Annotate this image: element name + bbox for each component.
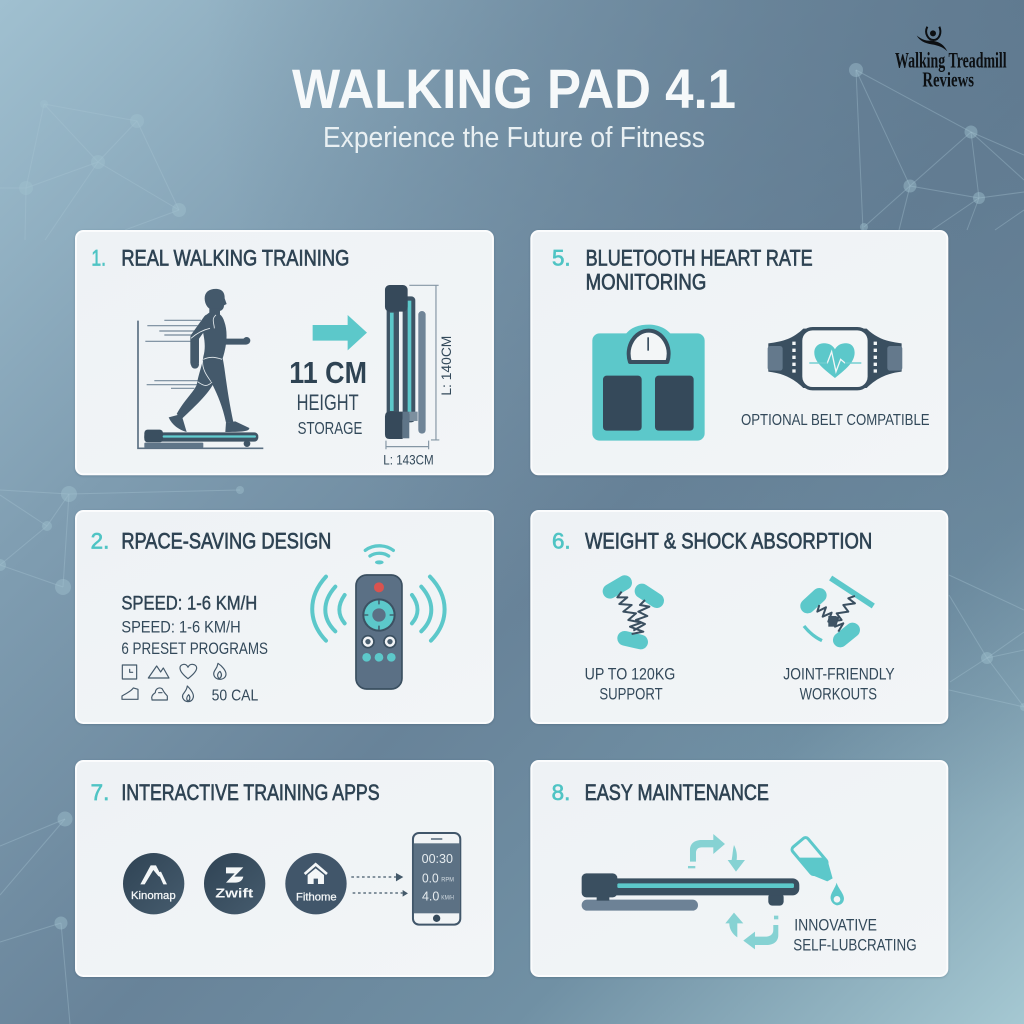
app: Kinomap: Kinomap [131, 890, 176, 902]
icon: spring support [610, 583, 657, 642]
logo icon [917, 27, 947, 51]
panel 1: real walking training [76, 231, 493, 474]
icon: remote control [312, 546, 445, 689]
heading number: 2. [91, 529, 109, 554]
icon: phone: 0.0 [422, 871, 439, 885]
panel 5: bluetooth heart rate monitoring [531, 231, 947, 474]
app: Fithome: Fithome [296, 892, 337, 904]
icon: heart rate belt [768, 329, 902, 389]
icon: phone: RPM [441, 877, 454, 883]
program icons [122, 663, 226, 702]
app: Kinomap [123, 853, 184, 914]
spec: speed bold: SPEED: 1-6 KM/H [121, 593, 257, 614]
heading number: 1. [91, 245, 106, 270]
icon: phone: KM/H [441, 896, 454, 902]
label: support: SUPPORT [599, 684, 663, 703]
stat: 11 cm: 11 CM [289, 356, 367, 390]
icon: lubricant bottle [791, 836, 844, 905]
app: Zwift [204, 853, 265, 914]
heading number: 7. [91, 780, 109, 805]
heading: BLUETOOTH HEART RATE [586, 245, 813, 270]
icon: walker on treadmill [138, 289, 263, 448]
icon: joint-friendly spring [804, 578, 873, 641]
panel 8: easy maintenance [531, 761, 947, 976]
heading: REAL WALKING TRAINING [121, 245, 349, 270]
heading: EASY MAINTENANCE [585, 780, 769, 805]
heading number: 8. [552, 780, 570, 805]
label: optional belt: OPTIONAL BELT COMPATIBLE [741, 412, 930, 429]
dimension: length: L: 143CM [383, 451, 434, 467]
heading number: 5. [552, 245, 571, 270]
dimension: height: L: 140CM [438, 336, 454, 396]
icon: smart scale [592, 325, 705, 441]
icon: phone: 4.0 [422, 890, 439, 904]
arrow [313, 315, 367, 350]
logo text line 2: Reviews [922, 69, 974, 91]
arrows to phone [351, 873, 408, 897]
icon: phone [413, 833, 460, 925]
title: WALKING PAD 4.1 [292, 57, 736, 120]
heading number: 6. [552, 529, 571, 554]
panel 2: space-saving design [76, 511, 493, 723]
subtitle: Experience the Future of Fitness [323, 122, 705, 154]
icon: folded walking pad with dimensions [383, 285, 454, 467]
label: up to 120kg: UP TO 120KG [585, 664, 675, 683]
panel 6: weight and shock absorption [531, 511, 947, 723]
label: 50 cal: 50 CAL [212, 688, 258, 705]
logo: Walking Treadmill Reviews [895, 27, 1007, 91]
icon: phone: 00:30 [422, 852, 453, 866]
label: joint-friendly: JOINT-FRIENDLY [783, 664, 895, 683]
panel 7: interactive training apps [76, 761, 493, 976]
label: innovative: INNOVATIVE [794, 916, 877, 935]
heading line 2: MONITORING [586, 269, 706, 294]
heading: RPACE-SAVING DESIGN [121, 529, 331, 554]
label: height: HEIGHT [297, 390, 359, 415]
label: workouts: WORKOUTS [800, 684, 877, 703]
spec: preset programs: 6 PRESET PROGRAMS [121, 639, 268, 658]
label: self-lubricating: SELF-LUBCRATING [793, 936, 917, 955]
label: storage: STORAGE [298, 418, 362, 438]
app: Fithome [285, 853, 347, 914]
icon: walking pad side view [582, 873, 799, 911]
heading: INTERACTIVE TRAINING APPS [121, 780, 380, 805]
spec: speed: SPEED: 1-6 KM/H [121, 618, 241, 637]
app: Zwift: Zwift [215, 885, 254, 900]
icon: maintenance cycle arrows [688, 834, 778, 949]
heading: WEIGHT & SHOCK ABSORPTION [585, 529, 872, 554]
